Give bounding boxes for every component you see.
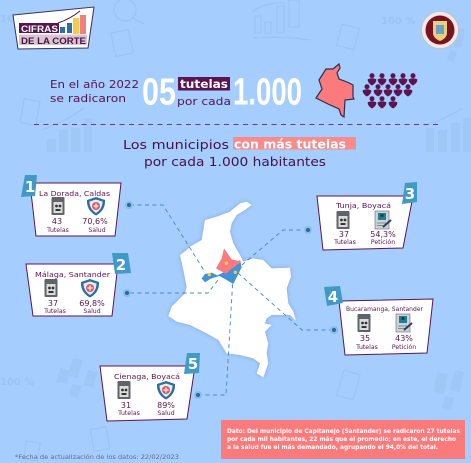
icon: colombia small map xyxy=(316,64,354,117)
card 1: la dorada: Tutelas xyxy=(46,227,69,234)
card 3: tunja: 3 xyxy=(405,185,415,203)
card 4: bucaramanga: Bucaramanga, Santander xyxy=(346,307,424,313)
card 3: tunja: 37 xyxy=(339,230,349,239)
card 2: malaga: 2 xyxy=(116,256,126,274)
headline statistic: tutelas xyxy=(180,77,228,91)
card 2: malaga: 37 xyxy=(48,299,58,308)
card 3: tunja: 54,3% xyxy=(370,230,396,239)
card 5: cienaga: 5 xyxy=(188,355,198,373)
card 2: malaga: Tutelas xyxy=(43,308,66,315)
card 5: cienaga: 31 xyxy=(121,401,131,410)
watermark sketches: 100 xyxy=(0,14,21,25)
card 2: malaga: 69,8% xyxy=(79,299,105,308)
card 1: la dorada: La Dorada, Caldas xyxy=(39,189,110,198)
card 1: la dorada: Salud xyxy=(88,227,106,234)
card 1: la dorada: 1 xyxy=(25,178,35,196)
card 3: tunja: Tutelas xyxy=(333,239,356,246)
card 4: bucaramanga xyxy=(324,286,433,355)
card 3: tunja: Tunja, Boyacá xyxy=(335,201,391,210)
card 1: la dorada xyxy=(21,175,121,236)
headline statistic: se radicaron xyxy=(50,93,126,105)
logo: cifras de la corte: DE LA CORTE xyxy=(21,36,86,47)
card 2: malaga xyxy=(26,253,131,316)
card 3: tunja xyxy=(317,182,417,250)
connector lines xyxy=(123,201,338,399)
card 2: malaga: Salud xyxy=(83,308,101,315)
seal: corte constitucional xyxy=(422,12,458,48)
card 4: bucaramanga: 43% xyxy=(395,334,413,343)
card 5: cienaga: Tutelas xyxy=(117,410,140,417)
headline statistic: En el año 2022 xyxy=(50,79,139,91)
card 4: bucaramanga: 4 xyxy=(328,288,338,306)
card 4: bucaramanga: Tutelas xyxy=(355,344,378,351)
card 2: malaga: Málaga, Santander xyxy=(35,270,111,279)
card 5: cienaga xyxy=(100,353,200,421)
map: colombia xyxy=(168,202,296,377)
card 5: cienaga: 89% xyxy=(157,401,175,410)
footnote: *Fecha de actualización de los datos: 22/02/2023 xyxy=(15,453,179,461)
section heading xyxy=(123,136,356,169)
section heading: por cada 1.000 habitantes xyxy=(144,154,326,169)
callout: capitanejo xyxy=(221,420,465,459)
card 4: bucaramanga: 35 xyxy=(360,334,370,343)
headline statistic: 1.000 xyxy=(233,72,302,114)
headline statistic: por cada xyxy=(177,96,231,108)
section heading: Los municipios xyxy=(123,137,229,152)
callout: capitanejo: por cada mil habitantes, 22 más que el promedio; en este, el derecho xyxy=(227,435,457,443)
card 5: cienaga: Cienaga, Boyacá xyxy=(114,372,180,381)
callout: capitanejo: a la salud fue el más demandado, agrupando el 94,0% del total. xyxy=(227,443,438,451)
watermark sketches: 100 % xyxy=(381,16,415,27)
headline statistic xyxy=(50,72,302,114)
logo: cifras de la corte xyxy=(13,7,94,49)
section heading: con más tutelas xyxy=(234,136,346,152)
card 3: tunja: Petición xyxy=(371,238,395,246)
card 1: la dorada: 70,6% xyxy=(82,217,108,226)
card 5: cienaga: Salud xyxy=(157,410,175,417)
card 4: bucaramanga: Petición xyxy=(392,343,416,351)
icon: people group xyxy=(363,73,417,108)
logo: cifras de la corte: CIFRAS xyxy=(21,24,58,35)
card 1: la dorada: 43 xyxy=(52,217,62,226)
watermark sketches: 100 % xyxy=(0,377,34,388)
headline statistic: 05 xyxy=(142,72,176,114)
